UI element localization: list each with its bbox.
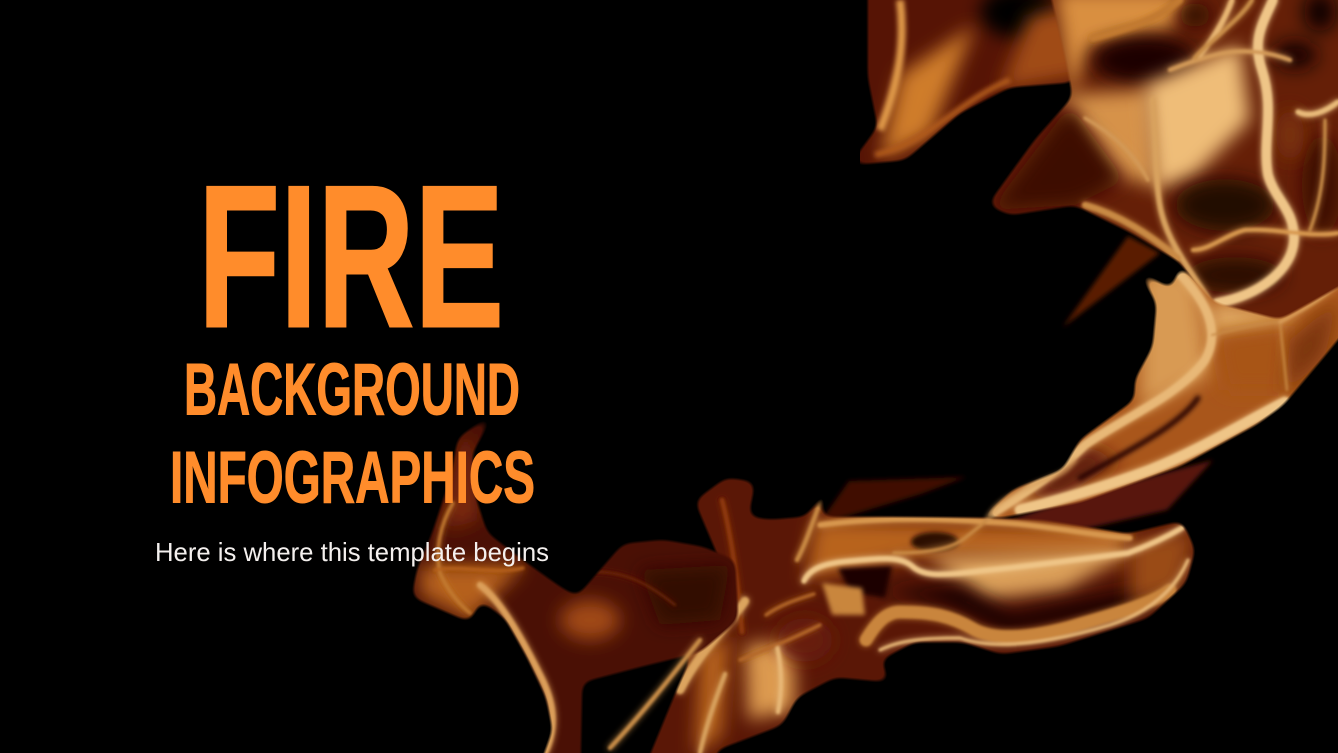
image: lower flame	[640, 470, 1200, 753]
image: upper flame lobe	[860, 0, 1070, 165]
image: upper wisp above lower flame	[818, 477, 966, 525]
image: top right flame mass	[990, 0, 1338, 345]
title: FIRE: FIRE	[198, 144, 504, 370]
image: diagonal flame strand	[610, 640, 700, 748]
image: flame band joining lower flame	[987, 460, 1075, 520]
image: right flame band	[980, 265, 1338, 530]
subtitle: Here is where this template begins	[155, 537, 549, 567]
image: thin flame fin	[1063, 236, 1160, 327]
title: BACKGROUND: BACKGROUND	[184, 350, 520, 430]
image: left flame tail	[410, 410, 750, 753]
title: INFOGRAPHICS: INFOGRAPHICS	[170, 438, 535, 518]
image: right flame underside	[1010, 460, 1213, 530]
title	[170, 144, 535, 518]
